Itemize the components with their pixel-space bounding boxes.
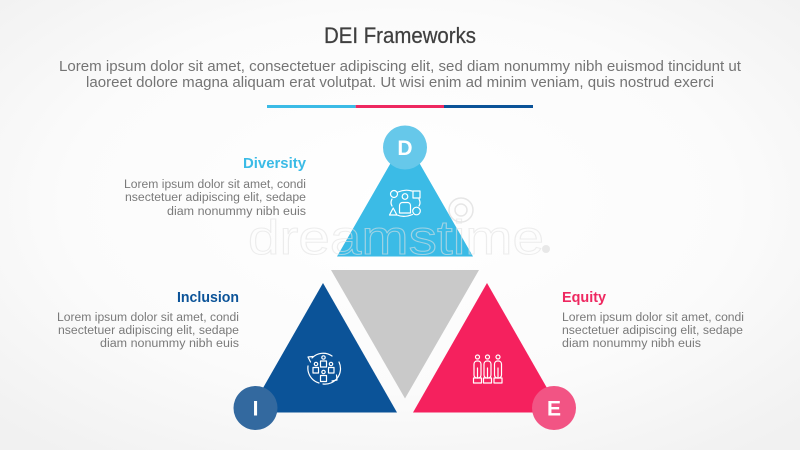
intro text: laoreet dolore magna aliquam erat volutpat. Ut wisi enim ad minim veniam, quis nostrud exerci (86, 75, 714, 91)
label: equity: Lorem ipsum dolor sit amet, condi (562, 312, 744, 324)
triangle: diversity (337, 138, 473, 256)
watermark (248, 198, 550, 265)
badge: E (532, 386, 576, 430)
triangle: equity (413, 283, 561, 412)
label: equity: Equity (562, 289, 607, 306)
label: inclusion: diam nonummy nibh euis (100, 338, 239, 350)
badge: D (383, 126, 427, 170)
label: inclusion (57, 289, 239, 350)
label: inclusion: Lorem ipsum dolor sit amet, condi (57, 312, 239, 324)
icon: diversity people and shapes (390, 190, 420, 216)
label: diversity: Diversity (243, 155, 307, 172)
label: equity (562, 289, 744, 350)
badge: I: I (253, 398, 258, 420)
badge: E: E (547, 398, 561, 420)
label: diversity: Lorem ipsum dolor sit amet, condi (124, 179, 306, 191)
badge: D: D (397, 137, 413, 160)
tricolor divider bar (267, 105, 533, 108)
label: diversity: nsectetuer adipiscing elit, sedape (125, 192, 306, 204)
title: DEI Frameworks (324, 23, 476, 48)
intro text (59, 59, 741, 91)
badge: I (234, 386, 278, 430)
label: diversity (124, 155, 307, 218)
triangle: inclusion (249, 283, 397, 412)
icon: equity figures on blocks (474, 355, 502, 383)
icon: inclusion group with arrows (308, 353, 340, 384)
watermark: dreamstime (248, 212, 544, 265)
label: equity: nsectetuer adipiscing elit, sedape (562, 325, 743, 337)
triangle: center gray (331, 270, 479, 398)
label: inclusion: nsectetuer adipiscing elit, sedape (58, 325, 239, 337)
label: inclusion: Inclusion (177, 289, 239, 306)
intro text: Lorem ipsum dolor sit amet, consectetuer adipiscing elit, sed diam nonummy nibh euismod tincidunt ut (59, 59, 741, 75)
label: diversity: diam nonummy nibh euis (167, 206, 306, 218)
label: equity: diam nonummy nibh euis (562, 338, 701, 350)
